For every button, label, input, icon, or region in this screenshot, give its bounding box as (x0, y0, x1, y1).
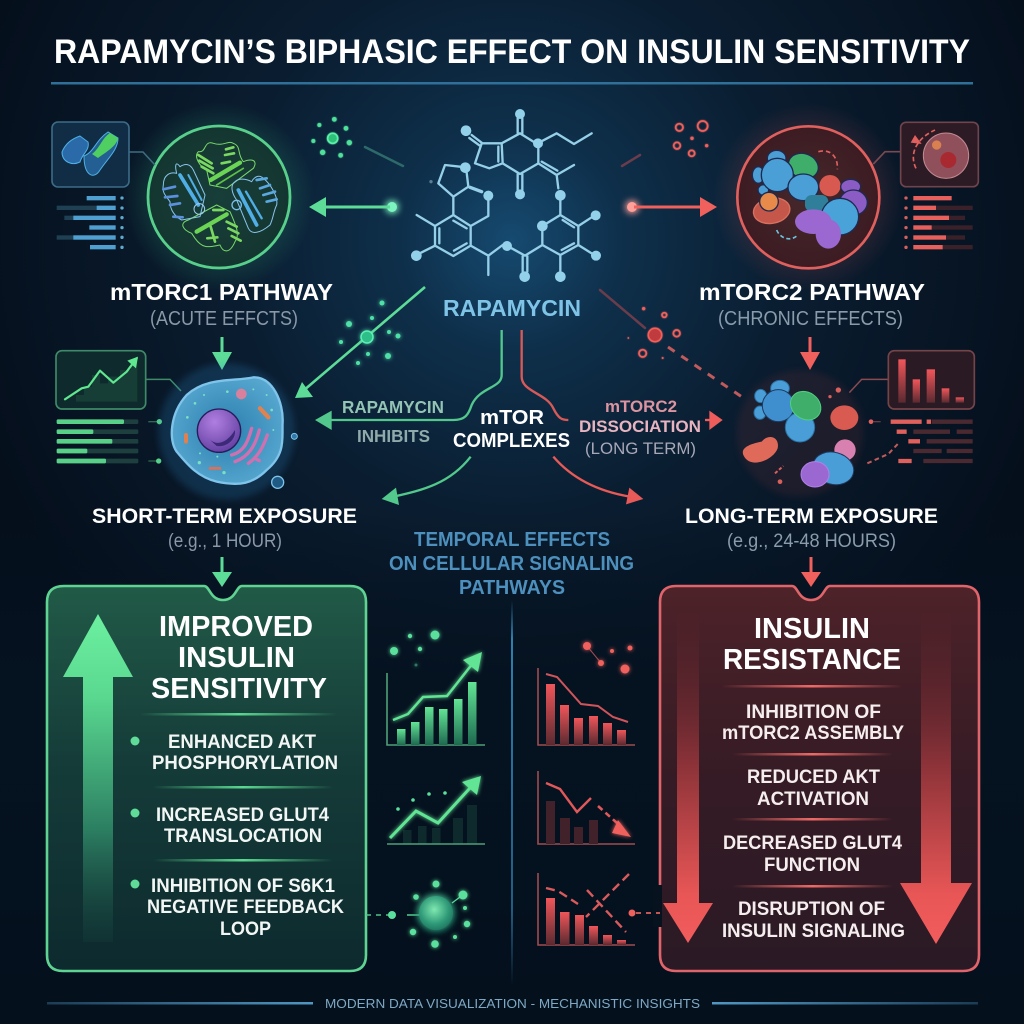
icon: left down arrow (663, 613, 713, 943)
item: mTORC2 assembly: INHIBITION OF (746, 702, 881, 723)
heading: mTORC1 pathway: mTORC1 PATHWAY (110, 279, 333, 305)
item: S6K1 feedback loop (130, 876, 344, 940)
item: mTORC2 assembly (722, 702, 904, 744)
heading: mTORC2 pathway (699, 279, 925, 330)
arrow: rapamycin to mTORC1 (309, 197, 397, 217)
data bars: long-term (867, 419, 973, 463)
footer: MODERN DATA VISUALIZATION - MECHANISTIC INSIGHTS (325, 996, 700, 1011)
heading: insulin resistance: INSULIN (754, 613, 870, 645)
heading: mTORC2 pathway: (CHRONIC EFFECTS) (718, 308, 903, 330)
heading: insulin resistance (723, 613, 901, 676)
item: decreased GLUT4 (723, 833, 902, 876)
item: disruption of signaling: DISRUPTION OF (738, 899, 885, 920)
chart: red disrupted bars (538, 873, 660, 945)
item: S6K1 feedback loop: INHIBITION OF S6K1 (151, 876, 335, 897)
item: enhanced AKT (130, 732, 338, 774)
inset: falling bar chart (849, 351, 974, 409)
panel: insulin resistance (653, 586, 979, 971)
item: S6K1 feedback loop: LOOP (220, 919, 271, 940)
data bars: mTORC1 (57, 196, 124, 249)
item: enhanced AKT: PHOSPHORYLATION (152, 753, 338, 774)
item: reduced AKT (747, 767, 880, 810)
item: S6K1 feedback loop: NEGATIVE FEEDBACK (147, 897, 344, 918)
heading: improved insulin sensitivity: INSULIN (178, 642, 295, 674)
protein ribbons (163, 142, 277, 251)
label: rapamycin: RAPAMYCIN (443, 295, 581, 321)
label: rapamycin inhibits: INHIBITS (357, 426, 430, 446)
label: mTOR complexes: mTOR (480, 407, 545, 429)
particles: red top (674, 121, 708, 156)
heading: long-term exposure (685, 505, 938, 552)
particles: red lower with dashed link (627, 307, 742, 397)
centre divider (511, 600, 513, 985)
molecule: rapamycin structure (411, 109, 601, 282)
heading: long-term exposure: LONG-TERM EXPOSURE (685, 505, 938, 528)
item: decreased GLUT4: DECREASED GLUT4 (723, 833, 902, 854)
label: mTOR complexes (453, 407, 570, 452)
chart: green rising line (387, 776, 485, 844)
item: increased GLUT4 (130, 805, 329, 847)
particles: green lower (339, 300, 400, 365)
label: mTORC2 dissociation: mTORC2 (605, 397, 677, 416)
icon: cell (158, 363, 297, 500)
heading: improved insulin sensitivity: IMPROVED (159, 611, 313, 643)
heading: long-term exposure: (e.g., 24-48 HOURS) (727, 531, 896, 552)
item: reduced AKT: ACTIVATION (757, 789, 869, 810)
label: rapamycin inhibits: RAPAMYCIN (342, 397, 444, 417)
arrow: mTORC1 down (212, 337, 232, 370)
label: mTORC2 dissociation: (LONG TERM) (585, 439, 696, 458)
data bars: mTORC2 (904, 196, 973, 249)
mTORC1 protein circle (124, 102, 314, 292)
caption: temporal effects: TEMPORAL EFFECTS (414, 529, 610, 551)
item: increased GLUT4: INCREASED GLUT4 (156, 805, 329, 826)
heading: insulin resistance: RESISTANCE (723, 644, 901, 676)
inset: rising line chart (56, 351, 181, 409)
item: decreased GLUT4: FUNCTION (764, 855, 860, 876)
arrows into outcome panels (212, 557, 821, 587)
icon: green cell with dashed link (366, 880, 470, 948)
label: mTORC2 dissociation (579, 397, 701, 458)
item: enhanced AKT: ENHANCED AKT (168, 732, 316, 753)
icon: dissociated protein complex (737, 370, 863, 497)
heading: mTORC1 pathway: (ACUTE EFFCTS) (150, 308, 298, 330)
faint radial spokes around molecule (365, 147, 645, 328)
label: mTOR complexes: COMPLEXES (453, 430, 570, 452)
heading: improved insulin sensitivity (151, 611, 327, 705)
item: disruption of signaling: INSULIN SIGNALING (722, 921, 905, 942)
item: reduced AKT: REDUCED AKT (747, 767, 880, 788)
label: mTORC2 dissociation: DISSOCIATION (579, 417, 701, 436)
panel: improved insulin sensitivity (47, 586, 366, 971)
mTORC2 protein circle (713, 102, 903, 292)
icon: right down arrow (900, 613, 972, 944)
heading: short-term exposure (92, 505, 357, 552)
chart: red falling line (538, 771, 635, 844)
centre: branching mTOR arrows (315, 330, 723, 517)
title: RAPAMYCIN’S BIPHASIC EFFECT ON INSULIN SENSITIVITY (54, 33, 970, 71)
chart: red falling bars (538, 642, 635, 745)
inset: cell with cycle arrow (873, 122, 978, 187)
chart: green rising bars (387, 630, 485, 745)
caption: temporal effects: ON CELLULAR SIGNALING (389, 553, 634, 575)
heading: short-term exposure: SHORT-TERM EXPOSURE (92, 505, 357, 528)
icon: up arrow (63, 614, 133, 942)
heading: mTORC1 pathway (110, 279, 333, 330)
label: rapamycin inhibits (342, 397, 444, 446)
arrow: mTORC2 down (800, 337, 820, 370)
item: increased GLUT4: TRANSLOCATION (164, 826, 322, 847)
inset: protein structure (52, 122, 155, 187)
arrow: rapamycin to mTORC2 (627, 197, 717, 217)
caption: temporal effects (389, 529, 634, 599)
data bars: short-term (57, 419, 162, 464)
heading: improved insulin sensitivity: SENSITIVITY (151, 673, 327, 705)
item: mTORC2 assembly: mTORC2 ASSEMBLY (722, 723, 904, 744)
caption: temporal effects: PATHWAYS (459, 577, 565, 599)
arrow: rapamycin to cell (295, 287, 425, 398)
item: disruption of signaling (722, 899, 905, 942)
heading: short-term exposure: (e.g., 1 HOUR) (168, 531, 282, 552)
particles: green top (311, 117, 352, 158)
heading: mTORC2 pathway: mTORC2 PATHWAY (699, 279, 925, 305)
